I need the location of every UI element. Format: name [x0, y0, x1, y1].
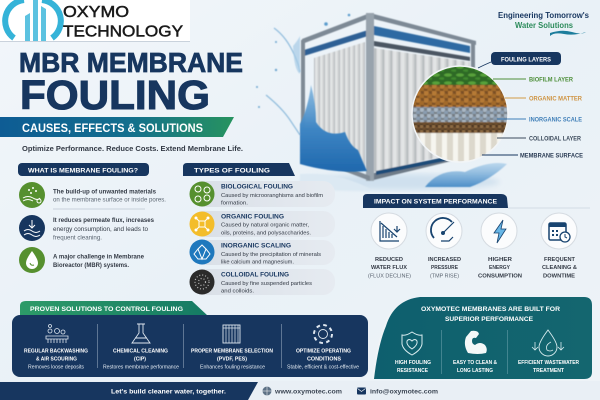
impact: cleaning: FREQUENT	[544, 257, 576, 263]
layer label: biofilm: BIOFILM LAYER	[529, 78, 574, 84]
logo: TECHNOLOGY	[63, 24, 183, 40]
heading	[183, 163, 295, 176]
type: inorganic: like calcium and magnesium.	[221, 260, 294, 266]
panel: types of fouling	[183, 163, 335, 295]
panel: what is membrane fouling	[18, 163, 166, 273]
solution: operating conditions	[287, 326, 359, 370]
heading: SUPERIOR PERFORMANCE	[445, 316, 533, 323]
benefit: efficient treatment: EFFICIENT WASTEWATER	[518, 360, 579, 366]
slogan	[498, 11, 590, 36]
heading	[18, 163, 149, 176]
type: colloidal	[190, 269, 335, 295]
type: organic: oils, proteins, and polysaccharides.	[221, 230, 311, 236]
heading: IMPACT ON SYSTEM PERFORMANCE	[374, 198, 497, 206]
type: inorganic	[190, 240, 335, 266]
solution: chemical cleaning: Restores membrane performance	[103, 364, 179, 370]
impact: cleaning: CLEANING &	[542, 265, 577, 271]
email: info@oxymotec.com	[370, 388, 438, 396]
heading	[421, 306, 560, 323]
type: organic: Caused by natural organic matter,	[221, 222, 310, 228]
solution: operating conditions: Stable, efficient & cost-effective	[287, 364, 359, 370]
type: organic	[190, 211, 335, 237]
membrane module illustration	[300, 13, 500, 190]
heading: OXYMOTEC MEMBRANES ARE BUILT FOR	[421, 306, 560, 313]
type: biological: formation.	[221, 200, 249, 206]
type: colloidal: and colloids.	[221, 288, 255, 294]
solution: chemical cleaning: CHEMICAL CLEANING	[113, 348, 168, 354]
magnified fouling layers	[410, 64, 510, 165]
panel: impact on system performance	[363, 194, 590, 280]
text: effects: frequent cleaning.	[53, 236, 102, 242]
solution: membrane selection	[191, 325, 273, 370]
icon: flux down	[19, 215, 45, 241]
layer label: biofilm	[493, 78, 574, 84]
text: context	[53, 254, 145, 269]
text: effects: energy consumption, and leads to	[53, 227, 149, 233]
icon: envelope	[357, 388, 366, 394]
impact: flux	[368, 213, 411, 280]
subtitle banner	[0, 117, 234, 137]
text: definition: The build-up of unwanted materials	[53, 190, 157, 196]
type: inorganic: Caused by the precipitation of minerals	[221, 252, 321, 258]
solution: operating conditions: CONDITIONS	[307, 356, 342, 362]
layer label: colloidal layer	[497, 136, 582, 142]
layer label: inorganic scale: INORGANIC SCALE	[529, 118, 582, 124]
impact: pressure: INCREASED	[428, 257, 461, 263]
solution: membrane selection: PROPER MEMBRANE SELECTION	[191, 348, 273, 354]
text: context: Bioreactor (MBR) systems.	[53, 263, 129, 269]
impact: flux: (FLUX DECLINE)	[368, 274, 411, 280]
subtitle banner: CAUSES, EFFECTS & SOLUTIONS	[22, 121, 203, 135]
title	[19, 47, 243, 118]
icon: globe	[262, 386, 272, 396]
impact: flux: REDUCED	[375, 257, 403, 263]
heading: TYPES OF FOULING	[194, 168, 270, 174]
benefit: efficient treatment: TREATMENT	[533, 368, 564, 374]
impact: pressure: PRESSURE	[431, 265, 458, 271]
impact: pressure	[426, 213, 462, 280]
type: biological: Caused by microoranghisms and biofilm	[221, 193, 323, 199]
layer label: colloidal layer: COLLOIDAL LAYER	[529, 136, 582, 142]
layer label: membrane surface: MEMBRANE SURFACE	[520, 154, 583, 160]
heading: WHAT IS MEMBRANE FOULING?	[28, 168, 138, 174]
solution: backwashing	[24, 324, 88, 370]
benefit: fouling resistance: HIGH FOULING	[395, 360, 431, 366]
solution: chemical cleaning	[103, 324, 179, 370]
text: definition	[53, 190, 166, 204]
solution: membrane selection: Enhances fouling resistance	[200, 364, 265, 370]
benefit: easy to clean: EASY TO CLEAN &	[453, 360, 497, 366]
text: definition: on the membrane surface or inside pores.	[53, 198, 166, 204]
text: effects	[53, 218, 155, 242]
solution: membrane selection: (PVDF, PES)	[217, 356, 247, 362]
solution: backwashing: Removes loose deposits	[28, 364, 85, 370]
impact: cleaning: DOWNTIME	[543, 274, 575, 280]
solution: backwashing: & AIR SCOURING	[36, 356, 77, 362]
title: MBR MEMBRANE	[19, 47, 243, 78]
fouling layers pill	[478, 52, 561, 68]
panel: oxymotec membranes	[372, 297, 592, 379]
layer label: organic matter	[505, 96, 583, 102]
impact: energy: HIGHER	[488, 257, 512, 263]
icon: particles	[19, 182, 45, 208]
heading	[363, 194, 508, 208]
solution: chemical cleaning: (CIP)	[134, 356, 146, 362]
text: context: A major challenge in Membrane	[53, 254, 145, 260]
panel: proven solutions	[12, 301, 368, 377]
logo: OXYMO	[63, 4, 129, 21]
footer bar	[0, 381, 600, 400]
tagline: Optimize Performance. Reduce Costs. Extend Membrane Life.	[22, 144, 243, 153]
website: www.oxymotec.com	[274, 388, 342, 396]
type: biological	[190, 181, 335, 207]
footer message: Let's build cleaner water, together.	[111, 388, 226, 396]
layer label: membrane surface	[482, 154, 583, 160]
fouling layers pill: FOULING LAYERS	[501, 58, 551, 64]
benefit: fouling resistance: RESISTANCE	[397, 368, 429, 374]
logo	[0, 0, 190, 42]
benefit: efficient treatment	[518, 330, 579, 374]
slogan: Water Solutions	[515, 21, 574, 30]
impact: energy	[478, 213, 522, 280]
icon: water drop	[19, 247, 45, 273]
benefit: easy to clean	[453, 331, 497, 374]
title: FOULING	[20, 72, 210, 118]
type: colloidal: Caused by fine suspended particles	[221, 281, 312, 287]
heading tab	[20, 301, 208, 316]
type: biological: BIOLOGICAL FOULING	[221, 184, 293, 190]
impact: cleaning	[541, 213, 577, 280]
type: inorganic: INORGANIC SCALING	[221, 242, 291, 250]
text: effects: It reduces permeate flux, increases	[53, 218, 155, 224]
layer label: inorganic scale	[497, 118, 582, 124]
solution: operating conditions: OPTIMIZE OPERATING	[296, 348, 351, 354]
impact: pressure: (TMP RISE)	[430, 274, 459, 280]
benefit: fouling resistance	[395, 332, 431, 374]
water splash	[256, 14, 507, 190]
benefit: easy to clean: LONG LASTING	[457, 368, 493, 374]
slogan: Engineering Tomorrow's	[498, 11, 590, 20]
layer label: organic matter: ORGANIC MATTER	[529, 96, 583, 102]
impact: energy: ENERGY	[489, 265, 510, 271]
type: colloidal: COLLOIDAL FOULING	[221, 272, 289, 278]
type: organic: ORGANIC FOULING	[221, 214, 284, 220]
heading tab: PROVEN SOLUTIONS TO CONTROL FOULING	[30, 306, 183, 313]
solutions card	[12, 315, 368, 377]
impact: flux: WATER FLUX	[371, 265, 407, 271]
impact: energy: CONSUMPTION	[478, 274, 522, 280]
solution: backwashing: REGULAR BACKWASHING	[24, 348, 88, 354]
